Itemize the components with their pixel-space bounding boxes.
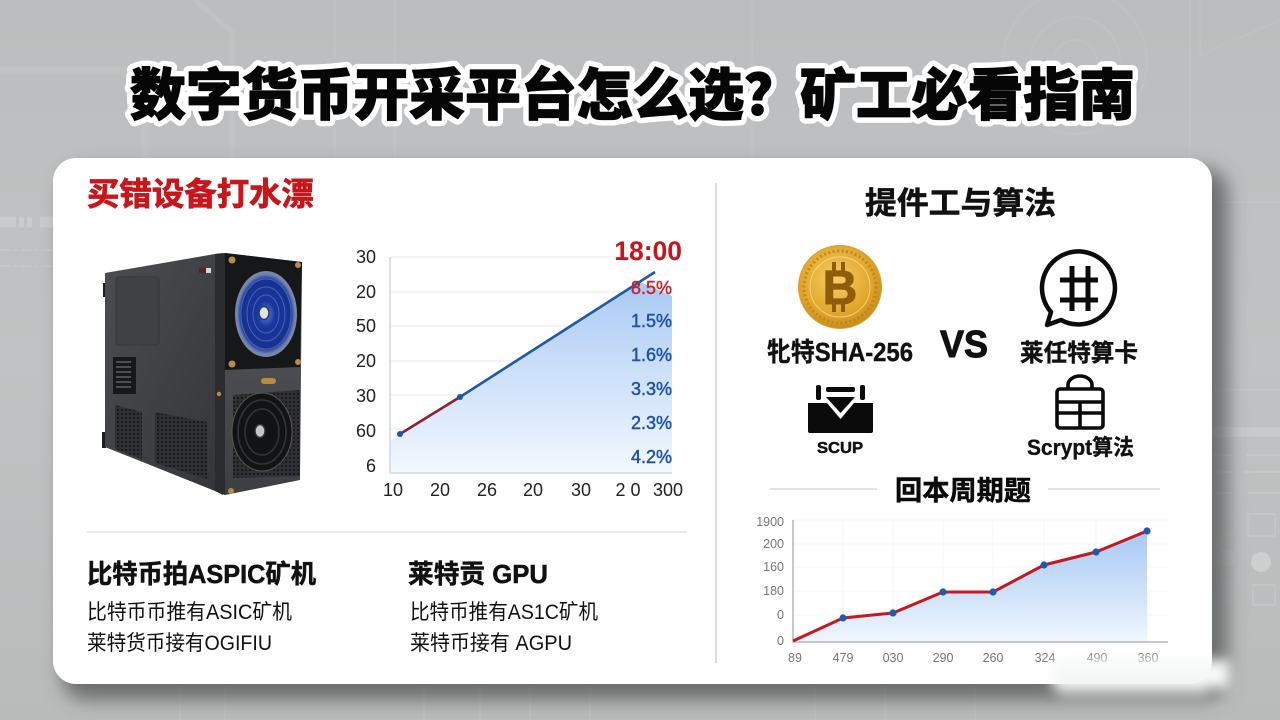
y axis labels: 20 [356,351,376,371]
x axis labels: 20 [430,480,450,500]
y axis labels: 180 [763,584,784,598]
y axis labels: 20 [356,282,376,302]
x axis labels: 2 0 [615,480,641,500]
text block: bitcoin ASIC: 比特币拍ASPIC矿机 [87,559,316,589]
title: 数字货币开采平台怎么选？矿工必看指南 [130,51,1135,132]
image: mining machine [102,253,302,495]
percent labels: 1.5% [631,311,672,331]
percent labels: 2.3% [631,413,672,433]
y axis labels: 50 [356,316,376,336]
VS: VS [940,324,988,366]
y axis labels: 30 [356,247,376,267]
text block: litecoin GPU: 莱特贡 GPU [408,559,548,589]
icon: bag grid [1057,376,1103,428]
percent labels: 8.5% [631,278,672,298]
text block: bitcoin ASIC: 莱特货币接有OGIFIU [87,632,272,655]
x axis labels: 26 [477,480,497,500]
text block: bitcoin ASIC [87,559,316,655]
icon: chat bubble hash [1042,251,1115,325]
icon: black fan [232,393,292,471]
x axis labels: 324 [1035,651,1055,665]
x axis labels: 479 [833,651,853,665]
x axis labels: 490 [1087,651,1107,665]
x axis labels: 20 [523,480,543,500]
percent labels [631,278,672,467]
x axis labels: 360 [1138,651,1158,665]
icon: bitcoin coin: B [823,262,857,315]
text block: litecoin GPU [408,559,598,655]
label: Scrypt: Scrypt算法 [1027,435,1134,460]
label: litecoin card: 莱任特算卡 [1020,340,1138,367]
x axis labels: 30 [571,480,591,500]
x axis labels: 260 [983,651,1003,665]
x axis labels: 89 [788,651,802,665]
x axis labels [383,480,683,500]
x axis labels: 10 [383,480,403,500]
heading: hardware and algorithm: 提件工与算法 [865,186,1056,221]
x axis labels: 030 [883,651,903,665]
y axis labels: 6 [366,456,376,476]
watermark smudge [1052,660,1230,697]
y axis labels [756,515,784,648]
percent labels: 3.3% [631,379,672,399]
percent labels: 1.6% [631,345,672,365]
y axis labels: 60 [356,421,376,441]
x axis labels: 290 [933,651,953,665]
text block: litecoin GPU: 比特币推有AS1C矿机 [410,601,598,624]
x axis labels: 300 [653,480,683,500]
y axis labels [356,247,376,476]
y axis labels: 0 [777,608,784,622]
title: 数字货币开采平台怎么选？矿工必看指南 [130,51,1135,132]
y axis labels: 160 [763,560,784,574]
panel shadow [62,168,1228,700]
icon: bitcoin coin [798,246,882,328]
percent labels: 4.2% [631,447,672,467]
y axis labels: 0 [777,634,784,648]
heading: wrong equipment: 买错设备打水漂 [87,176,314,212]
label: SCUP: SCUP [817,440,863,457]
highlight value: 18:00 [614,236,682,266]
text block: litecoin GPU: 莱特币接有 AGPU [410,632,572,655]
area chart: payback [756,515,1168,665]
icon: SCUP inbox [808,385,873,433]
text block: bitcoin ASIC: 比特币币推有ASIC矿机 [87,601,292,624]
y axis labels: 30 [356,386,376,406]
heading: payback period: 回本周期题 [895,476,1031,506]
line chart: growth [356,236,683,500]
y axis labels: 200 [763,537,784,551]
x axis labels [788,651,1158,665]
main white panel [53,158,1212,684]
y axis labels: 1900 [756,515,784,529]
icon: blue fan [235,271,297,357]
label: SHA-256: 牝特SHA-256 [767,337,913,367]
